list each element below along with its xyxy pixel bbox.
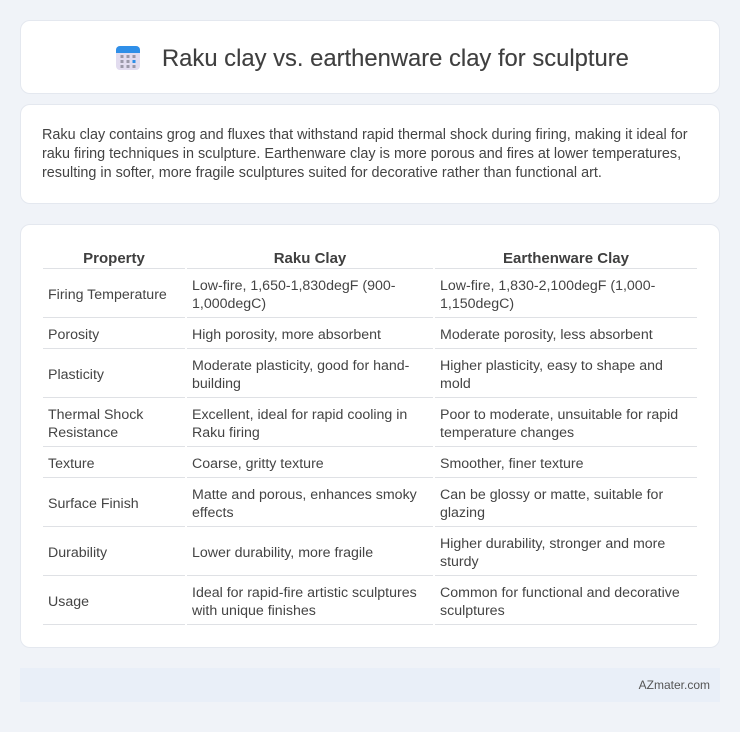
- comparison table: Raku firing: [192, 425, 260, 441]
- comparison table: Common for functional and decorative: [440, 585, 680, 601]
- comparison table: [43, 250, 697, 625]
- footer source text: AZmater.com: [639, 678, 710, 692]
- comparison table: 1,000degC): [192, 296, 266, 312]
- comparison table: Thermal Shock: [48, 407, 143, 423]
- intro text: raku firing techniques in sculpture. Earthenware clay is more porous and fires at lower temperatures,: [42, 146, 681, 162]
- comparison table: Matte and porous, enhances smoky: [192, 487, 417, 503]
- comparison table: Poor to moderate, unsuitable for rapid: [440, 407, 678, 423]
- comparison table: mold: [440, 376, 471, 392]
- comparison table: Ideal for rapid-fire artistic sculptures: [192, 585, 417, 601]
- comparison table: temperature changes: [440, 425, 574, 441]
- comparison table: Porosity: [48, 327, 99, 343]
- comparison table: Coarse, gritty texture: [192, 456, 324, 472]
- comparison table: High porosity, more absorbent: [192, 327, 381, 343]
- comparison table: Smoother, finer texture: [440, 456, 584, 472]
- comparison table: Texture: [48, 456, 95, 472]
- comparison table: Earthenware Clay: [503, 250, 629, 267]
- comparison table: building: [192, 376, 241, 392]
- comparison table: effects: [192, 505, 234, 521]
- comparison table: Firing Temperature: [48, 287, 167, 303]
- comparison table: Moderate porosity, less absorbent: [440, 327, 653, 343]
- title: Raku clay vs. earthenware clay for sculpture: [162, 45, 629, 72]
- comparison table card: [20, 224, 720, 648]
- comparison table: Raku Clay: [274, 250, 346, 267]
- comparison table: Surface Finish: [48, 496, 139, 512]
- intro text: Raku clay contains grog and fluxes that withstand rapid thermal shock during firing, making it ideal for: [42, 127, 688, 143]
- intro text: resulting in softer, more fragile sculptures suited for decorative rather than functional art.: [42, 165, 602, 181]
- comparison table: Higher plasticity, easy to shape and: [440, 358, 663, 374]
- comparison table: 1,150degC): [440, 296, 514, 312]
- intro card: [20, 104, 720, 204]
- title card: [20, 20, 720, 94]
- comparison table: sturdy: [440, 554, 479, 570]
- comparison table: Low-fire, 1,830-2,100degF (1,000-: [440, 278, 655, 294]
- comparison table: Lower durability, more fragile: [192, 545, 373, 561]
- comparison table: Resistance: [48, 425, 118, 441]
- comparison table: with unique finishes: [192, 603, 316, 619]
- footer bar: [20, 668, 720, 702]
- comparison table: Low-fire, 1,650-1,830degF (900-: [192, 278, 395, 294]
- comparison table: Moderate plasticity, good for hand-: [192, 358, 409, 374]
- comparison table: glazing: [440, 505, 485, 521]
- comparison table: Higher durability, stronger and more: [440, 536, 665, 552]
- comparison table: Durability: [48, 545, 107, 561]
- comparison table: Can be glossy or matte, suitable for: [440, 487, 663, 503]
- icon: calendar: [116, 46, 140, 70]
- comparison table: Usage: [48, 594, 89, 610]
- intro text: [42, 127, 688, 181]
- comparison table: Plasticity: [48, 367, 104, 383]
- comparison table: sculptures: [440, 603, 505, 619]
- comparison table: Excellent, ideal for rapid cooling in: [192, 407, 407, 423]
- comparison table: Property: [83, 250, 145, 267]
